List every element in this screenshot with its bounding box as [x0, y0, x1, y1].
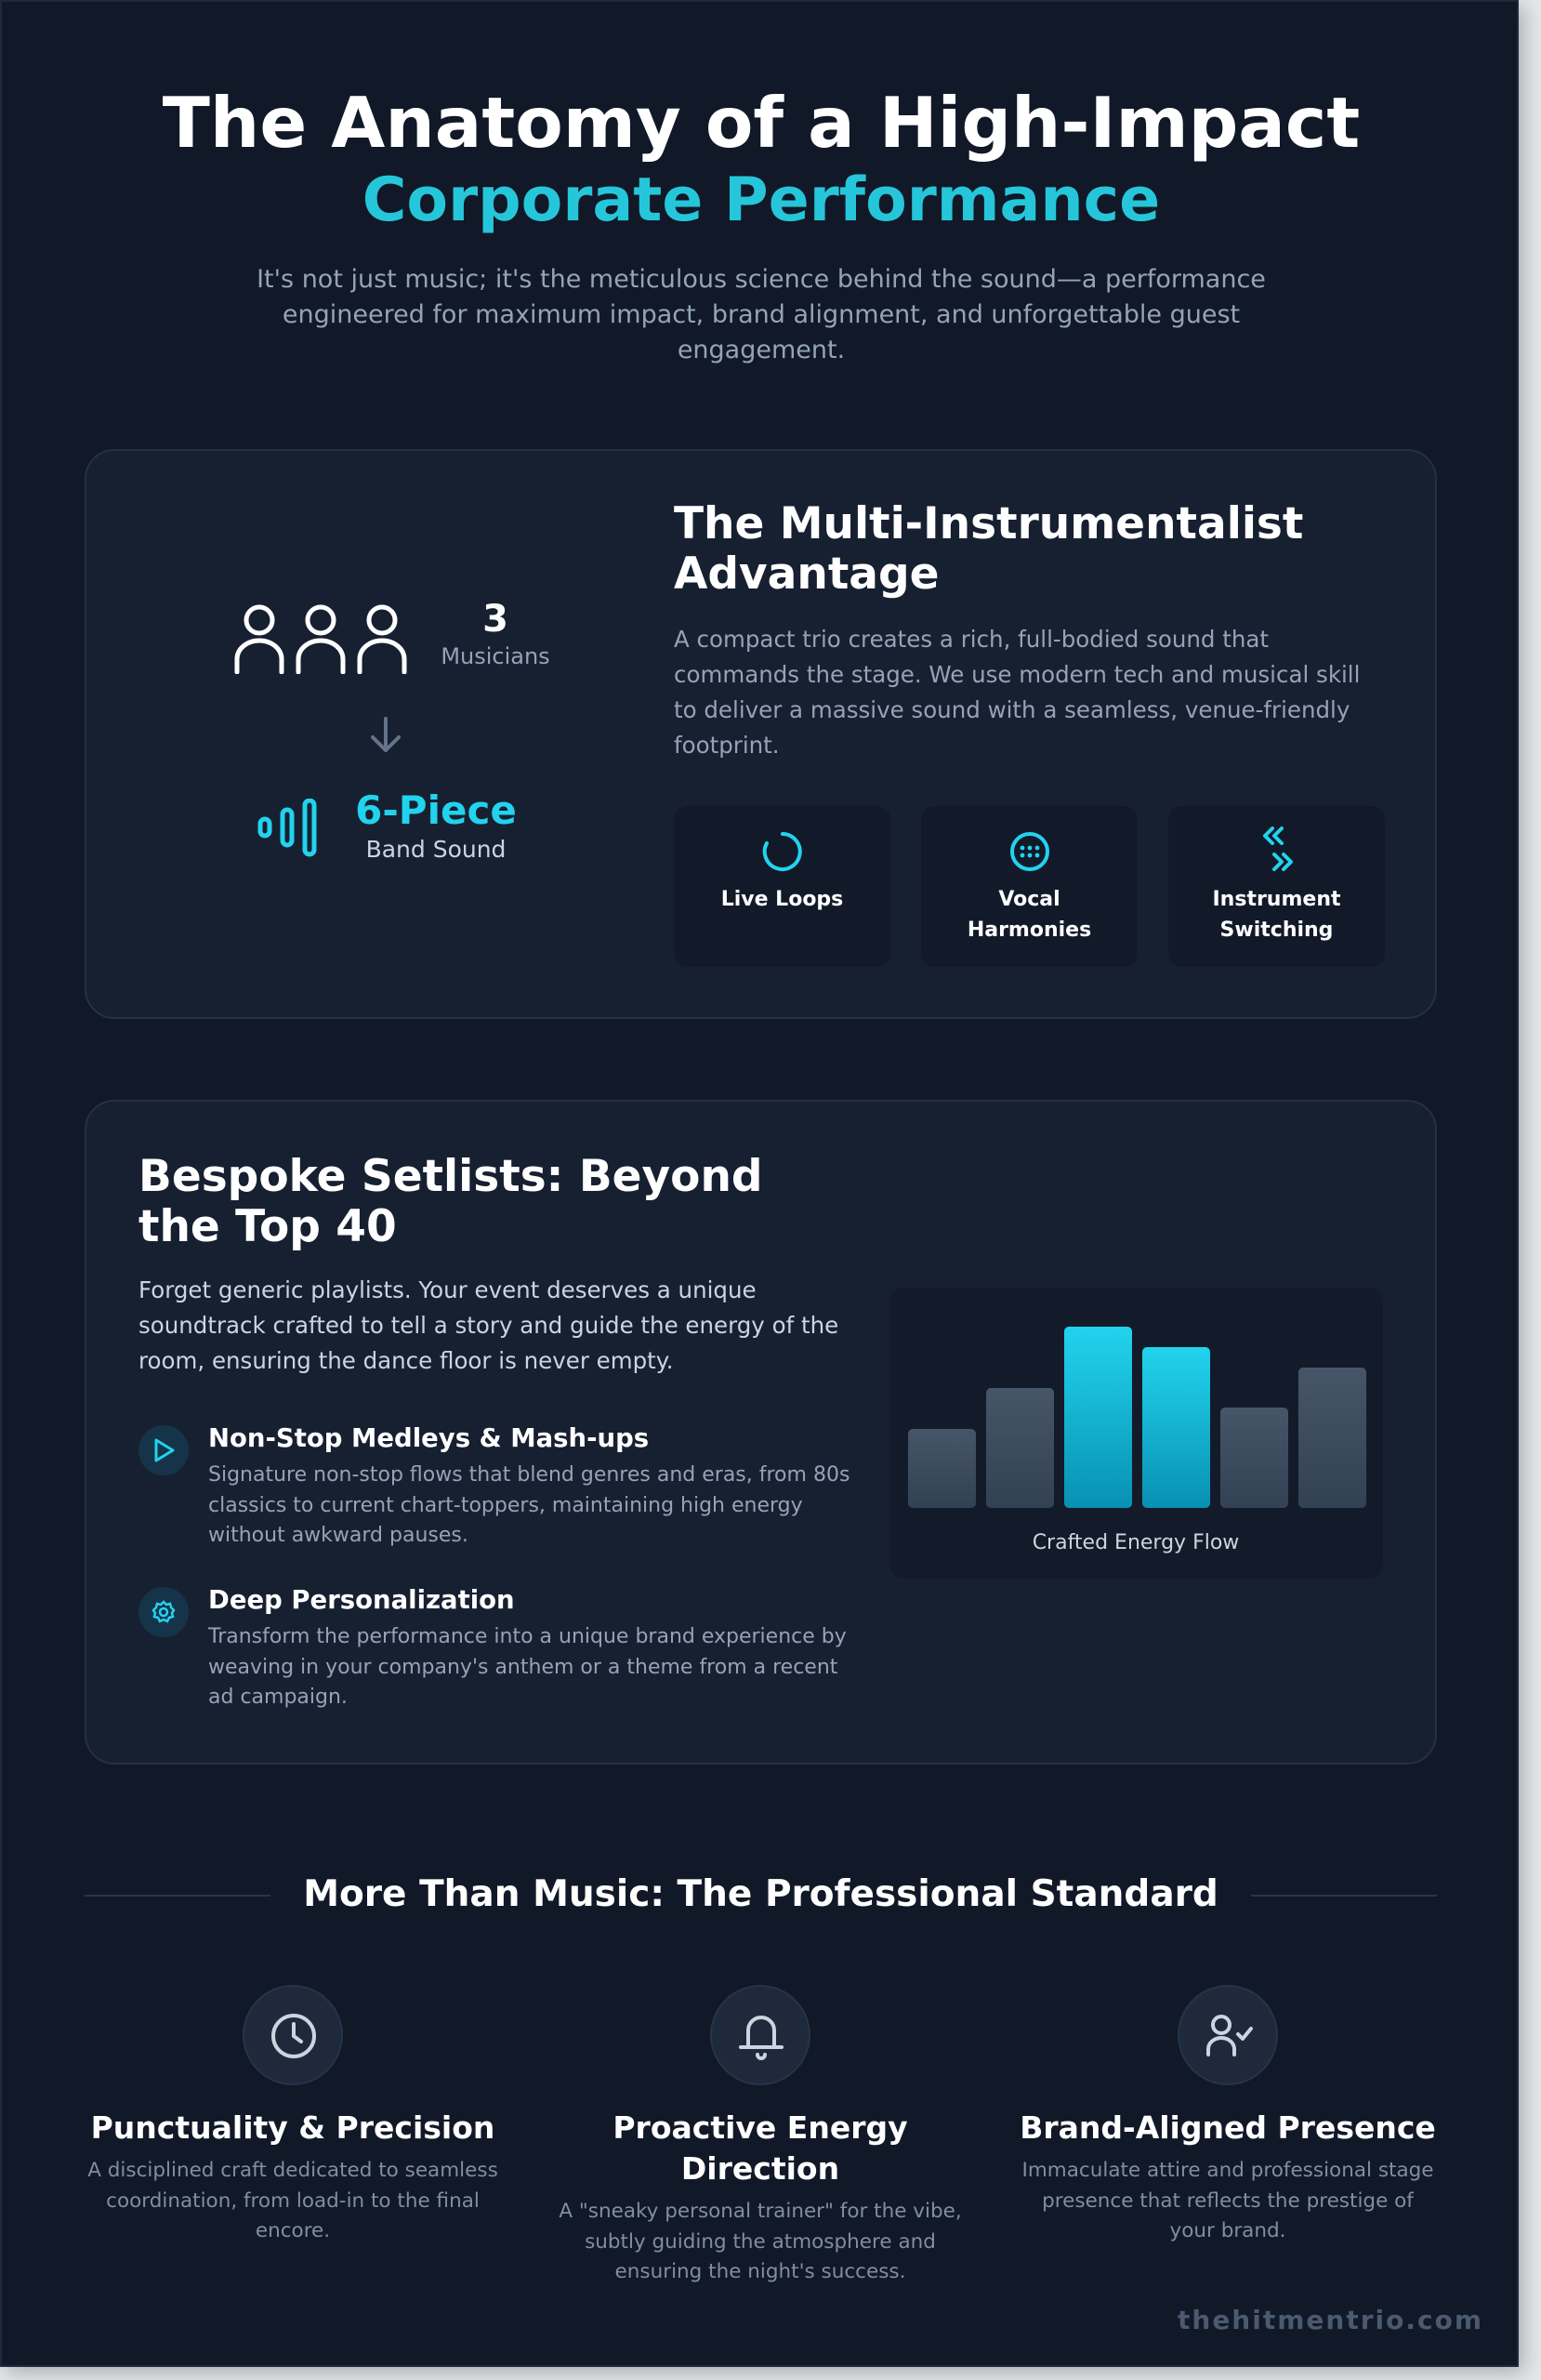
paragraph: Forget generic playlists. Your event deserves a unique soundtrack crafted to tell a story and guide the energy of the room, ensuring the dance floor is never empty. — [138, 1276, 838, 1374]
heading: Bespoke Setlists: Beyond the Top 40 — [138, 1151, 763, 1252]
title — [163, 82, 1360, 235]
column: brand presence: Immaculate attire and professional stage presence that reflects the prestige of your brand. — [1022, 2159, 1433, 2242]
stat: 3 musicians — [441, 598, 550, 669]
chart: crafted energy flow: Crafted Energy Flow — [1033, 1531, 1239, 1554]
card: live loops: Live Loops — [721, 888, 843, 911]
column: energy direction: Proactive Energy — [612, 2109, 908, 2146]
column: energy direction — [559, 1985, 962, 2283]
paragraph: A compact trio creates a rich, full-bodied sound that commands the stage. We use modern tech and musical skill to deliver a massive sound with a seamless, venue-friendly footprint. — [674, 626, 1360, 759]
panel: bespoke setlists — [85, 1100, 1437, 1765]
column: energy direction: A "sneaky personal trainer" for the vibe, subtly guiding the atmosphere and ensuring the night's success. — [559, 2200, 962, 2283]
stat: 3 musicians: Musicians — [441, 643, 550, 669]
heading: The Multi-Instrumentalist Advantage — [674, 498, 1303, 600]
column: brand presence — [1020, 1985, 1436, 2242]
column: punctuality: A disciplined craft dedicated to seamless coordination, from load-in to the final encore. — [87, 2159, 498, 2242]
item: deep personalization: Deep Personalization — [208, 1585, 515, 1615]
card: vocal harmonies: Harmonies — [968, 919, 1091, 942]
chart: crafted energy flow — [889, 1288, 1383, 1579]
stat: 3 musicians: 3 — [482, 598, 508, 641]
icon: play — [138, 1425, 189, 1475]
item: non-stop medleys — [138, 1423, 850, 1547]
card: instrument switching: Switching — [1220, 919, 1333, 942]
stat: 6-piece band sound — [355, 787, 517, 863]
stat: 6-piece band sound: 6-Piece — [355, 787, 517, 833]
arrow: down — [370, 717, 401, 752]
subtitle: It's not just music; it's the meticulous science behind the sound—a performance engineered for maximum impact, brand alignment, and unforgettable guest engagement. — [257, 265, 1266, 364]
title: Corporate Performance — [362, 165, 1160, 235]
card: vocal harmonies: Vocal — [998, 888, 1060, 911]
icon: sound bars — [258, 799, 316, 857]
icon: gear — [138, 1587, 189, 1637]
icon: user check — [1178, 1985, 1278, 2085]
column: brand presence: Brand-Aligned Presence — [1020, 2109, 1436, 2146]
column: punctuality: Punctuality & Precision — [91, 2109, 494, 2146]
icon: three people — [234, 604, 407, 674]
card: live loops — [674, 806, 890, 967]
item: non-stop medleys: Signature non-stop flows that blend genres and eras, from 80s classics to current chart-toppers, maintaining high energy without awkward pauses. — [208, 1463, 850, 1547]
item: deep personalization — [138, 1585, 847, 1709]
panel: multi-instrumentalist — [85, 449, 1437, 1019]
item: deep personalization: Transform the performance into a unique brand experience by weaving in your company's anthem or a theme from a recent ad campaign. — [208, 1625, 847, 1709]
footer: website: thehitmentrio.com — [1178, 2305, 1483, 2335]
section heading: professional standard: More Than Music: The Professional Standard — [303, 1873, 1218, 1915]
column: punctuality — [87, 1985, 498, 2242]
item: non-stop medleys: Non-Stop Medleys & Mash-ups — [208, 1423, 649, 1453]
card: instrument switching — [1168, 806, 1385, 967]
icon: clock — [243, 1985, 343, 2085]
title: The Anatomy of a High-Impact — [163, 82, 1360, 164]
stat: 6-piece band sound: Band Sound — [366, 836, 506, 863]
card: instrument switching: Instrument — [1212, 888, 1340, 911]
icon: bell — [710, 1985, 810, 2085]
card: vocal harmonies — [921, 806, 1138, 967]
column: energy direction: Direction — [681, 2150, 839, 2187]
